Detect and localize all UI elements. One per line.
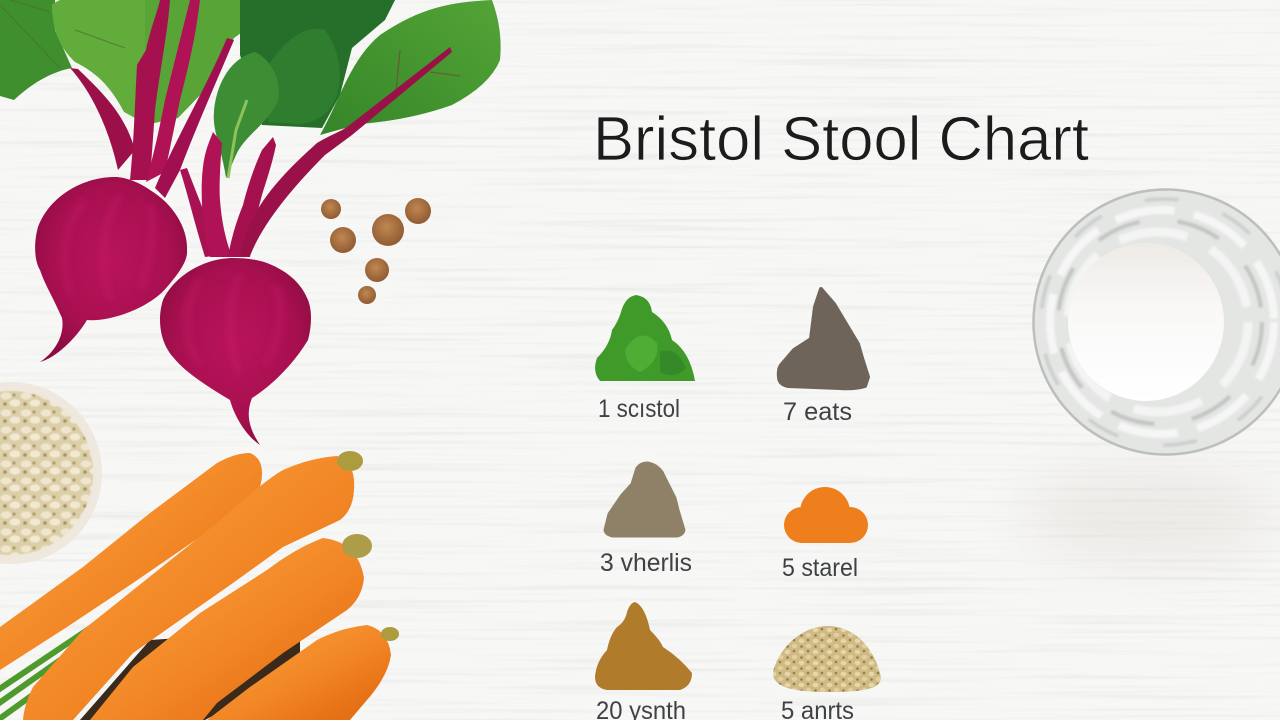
icon: green spinach pile: [595, 295, 695, 381]
beet rib highlights: [64, 195, 152, 300]
chart item 3: taupe mound: [600, 463, 692, 577]
icon: orange blobs: [784, 487, 868, 543]
leaf: mid green: [265, 29, 340, 124]
icon: ochre mound: [595, 602, 692, 690]
leaf: small spoon: [214, 52, 279, 178]
glass: ring: [1030, 185, 1280, 460]
beet greens: leaves: [0, 0, 501, 178]
seeds: scattered brown nuts: [321, 198, 431, 304]
beet: right: [160, 258, 311, 445]
beet stems: [70, 0, 452, 257]
carrots: [0, 451, 399, 720]
icon: taupe mound: [605, 463, 684, 536]
carrot 3: [90, 534, 372, 720]
glass: outer rim: [1034, 190, 1280, 454]
leaf: dark back: [240, 0, 395, 128]
title: Bristol Stool Chart: [593, 105, 1089, 174]
icon: grey-brown mound: [779, 289, 868, 388]
glass of water, viewed from above: [1030, 185, 1280, 460]
icon: grain pile: [773, 626, 881, 692]
label: 5 starel: [782, 554, 858, 582]
leaf: pale green: [52, 0, 165, 118]
leaf: middle behind stems: [145, 0, 260, 125]
chart item 2: grey-brown swirl: [779, 289, 868, 426]
carrot 1: [0, 453, 262, 670]
glass: inner water: [1068, 243, 1224, 401]
beet rib highlights: [187, 275, 280, 375]
carrot 2: [23, 451, 363, 720]
chart item 1: green pile: [595, 295, 695, 423]
leaf: big right: [320, 0, 501, 135]
carrot tops: green stems: [0, 598, 135, 720]
chart item 6: grain pile: [773, 626, 881, 720]
label: 1 scıstol: [598, 395, 680, 423]
chart item 4: orange blobs: [782, 487, 868, 582]
label: 3 vherlis: [600, 549, 692, 577]
carrot gaps: shadow: [80, 630, 300, 720]
leaf: far left: [0, 0, 72, 100]
label: 7 eats: [783, 398, 852, 426]
bowl of grains: [0, 382, 102, 564]
carrot 4: [207, 625, 399, 720]
chart item 5: ochre mound: [595, 602, 692, 720]
beet: left: [35, 177, 187, 362]
